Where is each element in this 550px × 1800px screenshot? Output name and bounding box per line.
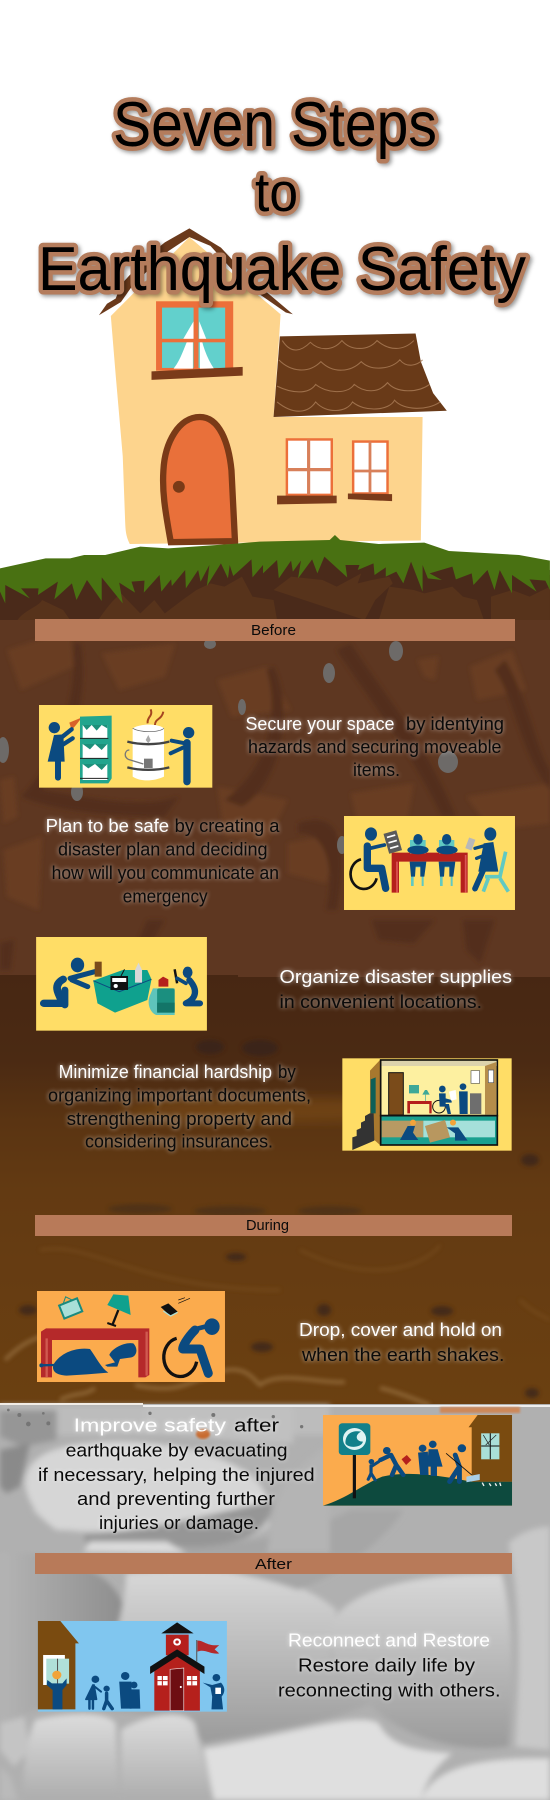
water heater [125,709,169,780]
supply bin [93,970,152,1013]
water bottle [135,963,142,983]
repair worker [47,1671,67,1709]
sweeping person [450,1444,466,1482]
text: plan to be safe [46,816,281,906]
seated person covering head [183,1318,220,1373]
basement wall [382,1121,423,1137]
text: secure your space: hazards and securing moveable [248,737,502,757]
house: upper window [152,301,243,380]
stairs [352,1113,374,1150]
bookcase [80,716,112,783]
text: improve safety: if necessary, helping the injured [38,1465,315,1485]
text: reconnect and restore: reconnecting with others. [278,1680,500,1700]
section bar: After: After [255,1556,292,1573]
house: upper roof [99,228,293,315]
wheelchair [164,1338,197,1376]
section bar: During: During [246,1217,289,1234]
background: gray rubble section [0,1403,550,1800]
first aid kit [402,1455,411,1465]
text: drop cover and hold on [299,1320,504,1365]
windows [471,1070,494,1083]
text: minimize financial hardship: considering insurances. [85,1132,273,1152]
floor band [381,1116,497,1145]
grass and topsoil [0,535,550,620]
text: minimize financial hardship [48,1062,311,1152]
workers [400,1120,468,1141]
text: improve safety: and preventing further [77,1489,275,1509]
kneeling adult [44,958,95,1005]
text: improve safety [38,1416,315,1533]
people [439,1083,468,1114]
icon: evacuating and helping [323,1415,512,1506]
house: door [163,417,235,542]
house: lower roof [274,334,447,417]
icon: organizing supplies [36,937,207,1031]
house: lower window right [348,442,392,501]
soil patches, lower band [0,920,494,970]
upper rubble stones [0,1405,330,1553]
text: plan to be safe: how will you communicate an [52,863,279,883]
section bar: During [35,1215,512,1236]
house [38,1621,79,1709]
text: plan to be safe: Plan to be safe [46,816,169,836]
repaired window [43,1655,69,1685]
child right [436,834,458,886]
title: to [255,161,298,223]
school [150,1622,204,1711]
phone [465,838,475,850]
debris [482,1483,501,1486]
house side wall [370,1060,380,1145]
background: sky [0,0,550,600]
house: lower window left [277,439,337,504]
icon: securing furniture and water heater [39,705,212,788]
woman securing [48,722,73,778]
text: secure your space [246,714,504,780]
text: plan to be safe: disaster plan and deciding [58,840,268,860]
rubble speckles [7,1409,303,1428]
text: organize disaster supplies: Organize disaster supplies [280,967,512,987]
text: drop cover and hold on: when the earth shakes. [301,1345,504,1365]
text: reconnect and restore [278,1630,500,1700]
chair [483,852,508,892]
text: secure your space: by identying [406,714,504,734]
desk [41,1328,149,1377]
text: minimize financial hardship: organizing important documents, [48,1086,311,1106]
child left [407,834,429,886]
plywood [425,1120,450,1143]
icon: reinforced home cross-section [342,1058,512,1151]
title [38,90,526,304]
parent and child [86,1676,112,1709]
text: improve safety: after [234,1416,279,1436]
picture and lamp [409,1085,430,1095]
flashlight [175,969,177,983]
seated woman [475,827,498,889]
section bar: Before: Before [251,622,296,639]
seated adult [365,827,386,888]
helping adult and child [368,1447,403,1480]
text: improve safety: injuries or damage. [99,1513,259,1533]
falling lamp [107,1294,131,1326]
text: improve safety: earthquake by evacuating [66,1440,288,1460]
man securing [171,727,194,782]
background: lower soil layer [0,975,550,1405]
hill [323,1474,512,1506]
backpack [149,988,175,1015]
kneeling adult 2 [177,967,200,1003]
section bar: After [35,1553,512,1574]
house [469,1415,512,1482]
icon: family planning at table [344,816,515,910]
stones [0,639,458,854]
falling picture [57,1293,82,1319]
first aid bag [159,977,168,987]
text: improve safety: Improve safety [74,1416,226,1436]
text: reconnect and restore: Restore daily life by [298,1656,475,1676]
wheelchair [351,859,377,889]
checklist [383,830,402,854]
text: plan to be safe: emergency [123,886,208,906]
text: plan to be safe: by creating a [175,816,281,836]
section bar: Before [35,619,515,641]
icon: reconnecting at school [38,1621,227,1712]
radio [110,969,128,990]
icon: drop cover hold on [37,1291,225,1382]
file cabinet [470,1093,481,1114]
text: minimize financial hardship: strengthening property and [67,1109,292,1129]
lower rubble stones [0,1510,550,1800]
house window [481,1433,499,1459]
text: minimize financial hardship: Minimize financial hardship [59,1062,272,1082]
crouching child [105,1343,136,1367]
table [392,853,468,893]
title: Earthquake Safety [38,235,526,304]
text: secure your space: items. [353,760,400,780]
text: secure your space: Secure your space [246,714,394,734]
background: upper soil layer [0,575,550,980]
table [407,1101,432,1113]
door [389,1073,403,1115]
upper room [381,1060,497,1116]
text: reconnect and restore: Reconnect and Restore [288,1630,490,1650]
adult and teen [119,1672,140,1709]
text: organize disaster supplies: in convenient locations. [280,992,482,1012]
text: minimize financial hardship: by [278,1062,296,1082]
house: walls [111,237,423,544]
flag [197,1640,219,1662]
text: drop cover and hold on: Drop, cover and hold on [299,1320,502,1340]
crouching adult [53,1349,108,1376]
house illustration [99,228,447,544]
broom [446,1453,472,1475]
title: Seven Steps [113,90,437,160]
standing couple [418,1441,443,1476]
tsunami sign [339,1423,370,1498]
teacher with clipboard [203,1674,224,1709]
wheelchair [433,1100,445,1113]
supply item [95,962,102,977]
falling book [161,1298,190,1316]
text: organize disaster supplies [280,967,512,1012]
document [449,1090,457,1101]
